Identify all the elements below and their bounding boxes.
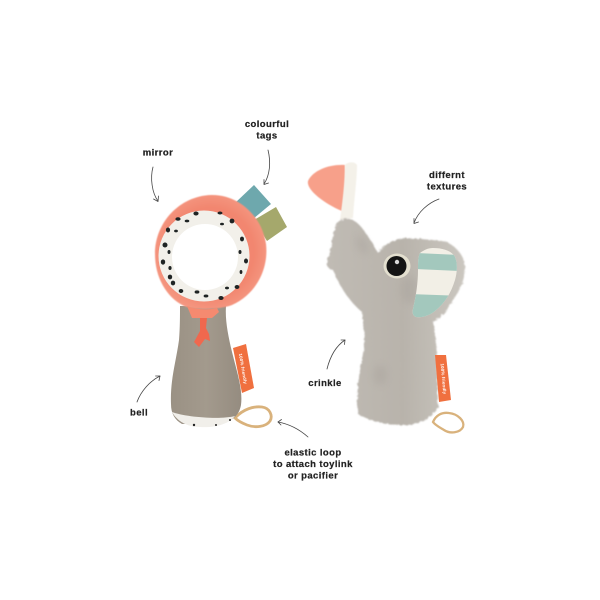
toy: mirror rattle	[155, 185, 287, 427]
arrow: elastic loop	[278, 420, 308, 437]
white trunk tip	[340, 162, 357, 220]
elastic loop right	[433, 413, 463, 432]
arrow: bell	[137, 376, 160, 402]
label: elastic loop: elastic loop	[284, 448, 342, 458]
mirror	[172, 224, 238, 290]
arrow: textures	[414, 199, 439, 224]
label tag left: 100% friendly	[238, 353, 248, 385]
label: different textures: differnt	[429, 170, 465, 181]
tag: green	[254, 207, 287, 241]
ear lining	[412, 248, 457, 318]
elastic loop left	[235, 407, 271, 427]
toy: elephant plush	[308, 162, 465, 432]
label: colourful tags: tags	[256, 130, 278, 142]
label: crinkle: crinkle	[308, 378, 342, 389]
coral bow and knot	[187, 306, 219, 347]
dotted fabric ring	[158, 210, 250, 302]
plush coral ring	[155, 195, 266, 309]
tag: blue	[235, 185, 271, 219]
label tag right: 100% friendly	[440, 363, 447, 395]
label: elastic loop: to attach toylink	[273, 459, 353, 470]
label tag right	[435, 355, 451, 402]
arrow: crinkle	[327, 340, 345, 369]
label: bell: bell	[130, 408, 148, 418]
plush body and head	[327, 219, 465, 425]
coral cone	[308, 165, 345, 211]
label tag left	[233, 344, 254, 393]
eye	[384, 254, 410, 278]
arrow: mirror	[152, 167, 158, 202]
label: elastic loop: or pacifier	[288, 470, 338, 482]
label: mirror: mirror	[143, 148, 173, 158]
rattle handle	[171, 306, 241, 424]
arrow: colourful tags	[264, 150, 270, 184]
label: colourful tags: colourful	[245, 119, 289, 130]
fur shading	[353, 234, 419, 385]
label: different textures: textures	[427, 182, 467, 192]
dotted base	[172, 412, 235, 427]
